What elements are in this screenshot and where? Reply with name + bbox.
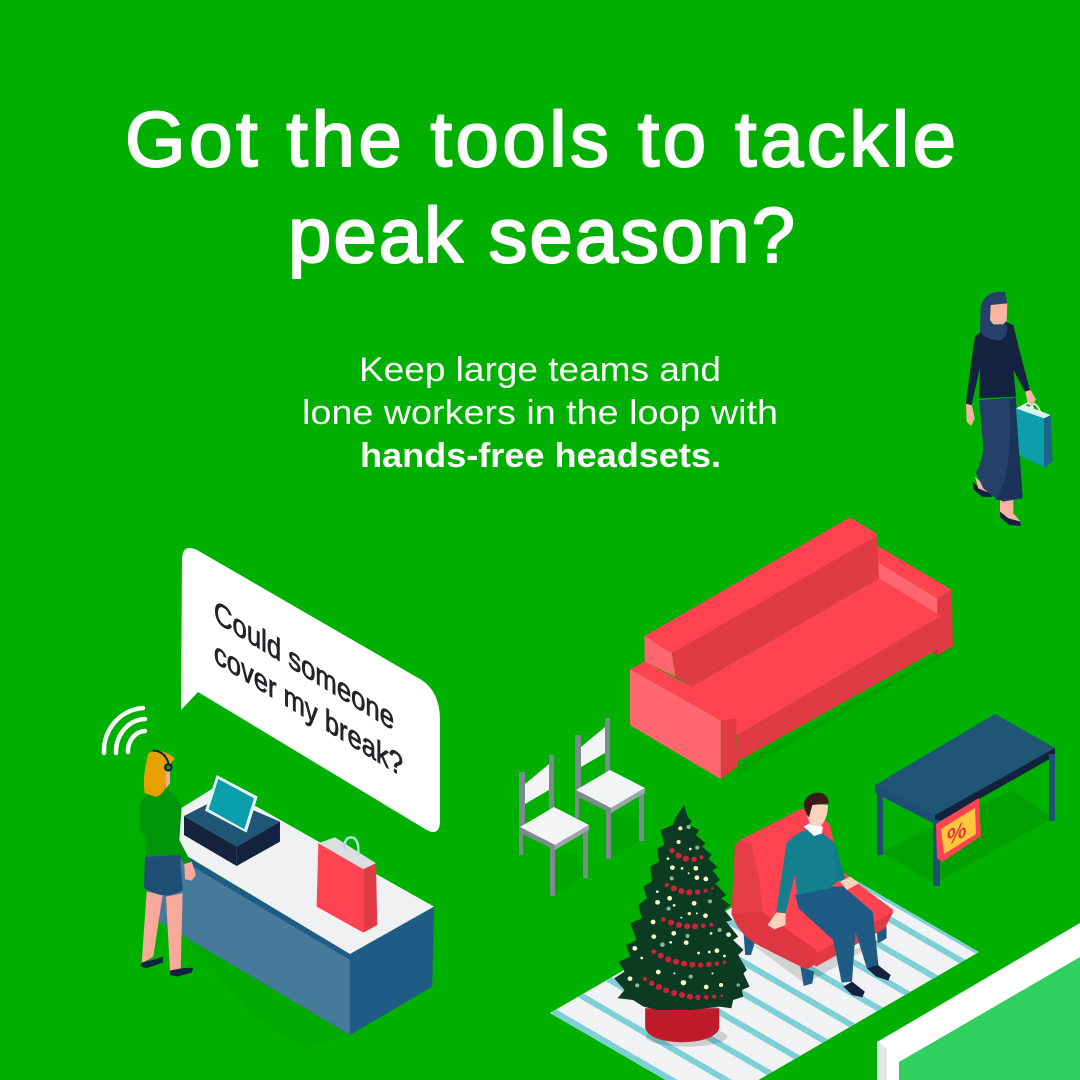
skirt [144,855,183,895]
front chair [519,755,589,896]
hands [768,913,785,929]
speech bubble [181,548,440,832]
trousers [795,887,879,983]
counter desk [145,775,434,1048]
muted lights [635,825,740,987]
subheading text: Keep large teams and [359,351,721,389]
sofa right arm [874,543,952,598]
subheading text: lone workers in the loop with [302,394,778,432]
sofa front arm [630,669,721,779]
subheading text: hands-free headsets. [360,437,721,475]
christmas tree [614,805,750,1047]
shopper woman with bag [966,292,1053,526]
garlands [643,848,726,1000]
hair [165,770,170,788]
sofa seat [630,578,941,735]
speech text: cover my break? [214,634,403,785]
face [806,803,828,826]
hand [184,862,196,881]
tree lights [628,826,731,989]
subheading text [302,351,778,475]
sale sign: % [947,817,967,852]
hair [804,793,829,817]
speech text: Could someone [214,593,394,738]
counter worker with headset [139,751,196,977]
wifi signal icon [104,708,145,753]
store window frame [877,923,1080,1080]
title: Got the tools to tackle [125,95,956,183]
dining chairs [519,718,645,896]
armchair [731,808,893,986]
sweater [139,789,191,864]
headset [153,751,169,767]
pot [645,1008,727,1047]
red sofa [630,517,955,779]
foliage [614,805,750,1010]
sofa backrest [645,517,877,653]
red shopping bag [317,837,377,933]
back chair [575,718,645,859]
striped rug [550,858,979,1080]
navy table with percent sign [875,714,1055,886]
jumper [776,830,839,913]
legs [142,892,163,963]
seated man [768,793,891,997]
shoes [843,982,865,997]
collar [804,823,823,836]
sale sign [936,798,981,862]
tablet [205,775,258,833]
title [125,95,956,279]
register box [184,775,280,866]
title: peak season? [288,191,795,279]
